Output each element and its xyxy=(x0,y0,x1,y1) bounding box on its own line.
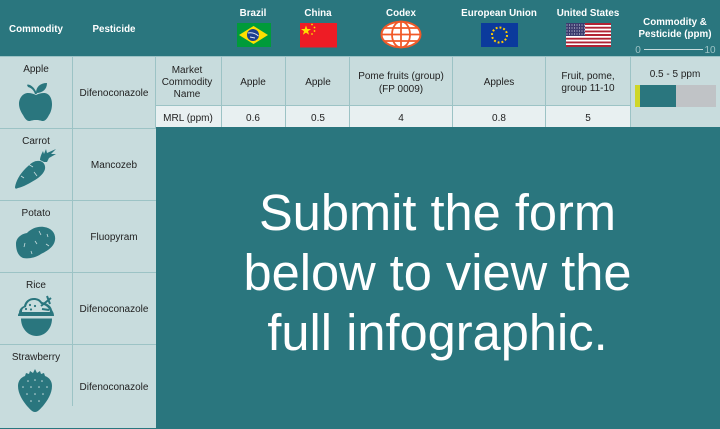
row label: market commodity name: Commodity xyxy=(162,77,212,88)
icon: apple xyxy=(19,83,52,121)
row: Rice: Difenoconazole xyxy=(80,304,149,315)
header: commodity and pesticide ppm scale: 0 xyxy=(635,45,641,56)
row: Potato xyxy=(16,208,138,258)
icon: potato xyxy=(16,227,55,258)
row: Potato: Potato xyxy=(22,208,51,219)
range bar xyxy=(635,85,716,107)
header: European Union: European Union xyxy=(461,8,537,19)
header: commodity and pesticide ppm scale: Commodity & xyxy=(643,17,707,28)
row: Strawberry: Difenoconazole xyxy=(80,382,149,393)
MRL values by market: 5 xyxy=(585,113,591,124)
commodity names by market: Apples xyxy=(484,77,514,88)
row: Apple: Difenoconazole xyxy=(80,88,149,99)
range label: 0.5 - 5 ppm xyxy=(650,69,700,80)
row: Carrot: Carrot xyxy=(22,136,50,147)
commodity names by market xyxy=(240,71,615,95)
commodity names by market: Apple xyxy=(305,77,331,88)
icon: carrot xyxy=(15,149,56,189)
row: Apple xyxy=(19,64,149,121)
header: China xyxy=(300,8,337,48)
MRL values by market: 0.6 xyxy=(246,113,260,124)
overlay message: Submit the form xyxy=(259,184,616,241)
MRL values by market xyxy=(246,113,591,124)
header: European Union xyxy=(461,8,537,47)
row: Strawberry xyxy=(12,352,149,412)
row label: market commodity name: Name xyxy=(174,89,201,100)
table header: commodity label: Commodity xyxy=(9,24,63,35)
MRL values by market: 0.8 xyxy=(492,113,506,124)
table header: pesticide label: Pesticide xyxy=(92,24,136,35)
overlay message: full infographic. xyxy=(267,304,608,361)
MRL values by market: 4 xyxy=(398,113,404,124)
row label: MRL: MRL (ppm) xyxy=(163,113,213,124)
icon: rice bowl xyxy=(18,296,54,336)
commodity names by market: (FP 0009) xyxy=(379,84,423,95)
header: Codex xyxy=(381,8,421,48)
header: United States: United States xyxy=(557,8,620,19)
panel: apple detail table xyxy=(156,57,720,127)
row: Carrot xyxy=(15,136,138,189)
icon: strawberry xyxy=(18,369,52,412)
header: commodity and pesticide ppm scale: Pesticide (ppm) xyxy=(639,29,711,40)
header: Codex: Codex xyxy=(386,8,417,19)
overlay message: below to view the xyxy=(243,244,632,301)
row: Rice: Rice xyxy=(26,280,46,291)
row: Potato: Fluopyram xyxy=(90,232,138,243)
row: Apple: Apple xyxy=(23,64,49,75)
header: commodity and pesticide ppm scale xyxy=(635,17,716,56)
commodity names by market: Fruit, pome, xyxy=(561,71,615,82)
MRL values by market: 0.5 xyxy=(311,113,325,124)
row: Rice xyxy=(18,280,149,336)
header: China: China xyxy=(304,8,332,19)
header: Brazil xyxy=(237,8,271,47)
header: commodity and pesticide ppm scale: 10 xyxy=(704,45,716,56)
row: Strawberry: Strawberry xyxy=(12,352,60,363)
header: United States xyxy=(557,8,620,47)
commodity names by market: Pome fruits (group) xyxy=(358,71,444,82)
row label: market commodity name: Market xyxy=(172,65,203,76)
commodity names by market: group 11-10 xyxy=(561,83,615,94)
row: Carrot: Mancozeb xyxy=(91,160,138,171)
header: Brazil: Brazil xyxy=(240,8,267,19)
commodity names by market: Apple xyxy=(240,77,266,88)
